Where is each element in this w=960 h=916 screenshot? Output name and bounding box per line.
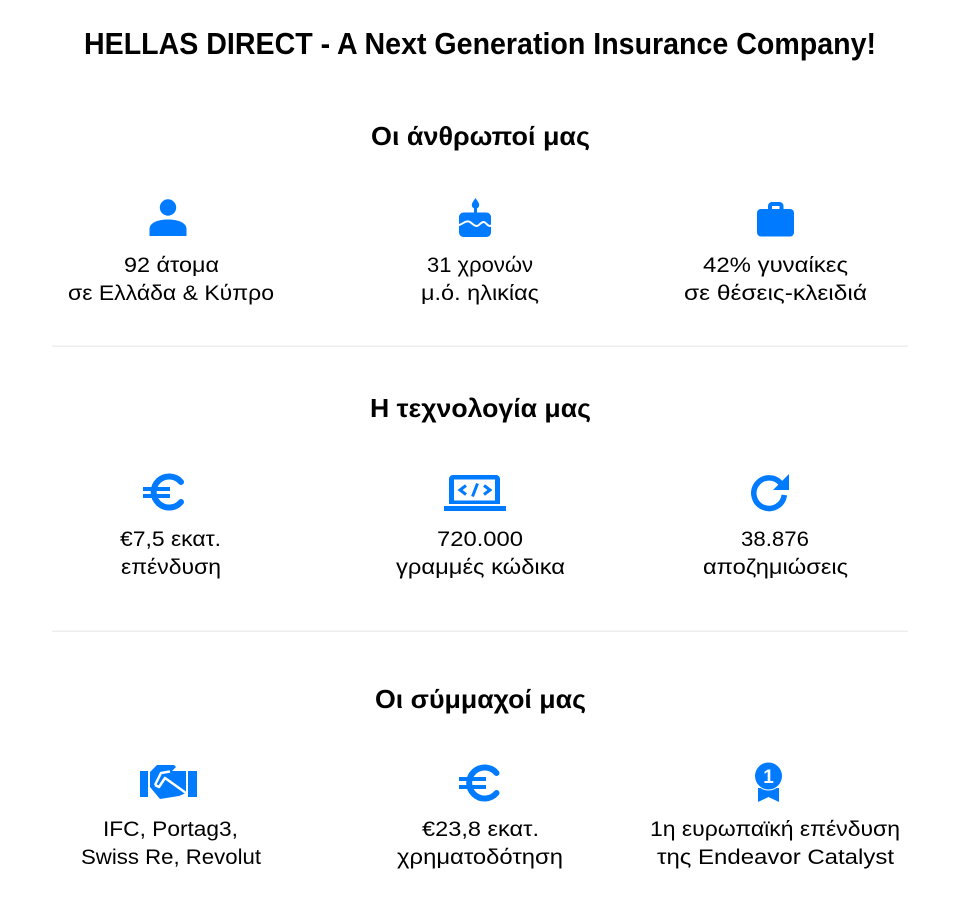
- panel: our people: [68, 121, 867, 305]
- panel: our technology: [120, 393, 848, 579]
- stat: average age: 31 χρονών: [427, 254, 533, 277]
- stat: women in key positions: σε θέσεις-κλειδιά: [684, 282, 867, 305]
- stat: investment: επένδυση: [121, 556, 221, 579]
- panel: our allies: [81, 684, 900, 869]
- icon: refresh arrow: [754, 474, 789, 508]
- stat: people count: [68, 254, 274, 305]
- stat: lines of code: γραμμές κώδικα: [396, 556, 565, 579]
- stat: Endeavor: [650, 818, 900, 869]
- icon: medal: 1: [763, 767, 774, 788]
- stat: average age: [421, 254, 539, 305]
- stat: partners: [81, 818, 261, 869]
- stat: women in key positions: [684, 254, 867, 305]
- icon: briefcase: [757, 202, 794, 236]
- title: HELLAS DIRECT - A Next Generation Insurance Company!: [84, 26, 876, 61]
- icon: laptop with code: [444, 475, 506, 511]
- icon: medal: [754, 762, 783, 802]
- stat: lines of code: 720.000: [437, 528, 523, 551]
- stat: partners: IFC, Portag3,: [103, 818, 238, 841]
- stat: Endeavor: 1η ευρωπαϊκή επένδυση: [650, 818, 900, 841]
- stat: people count: 92 άτομα: [124, 254, 219, 277]
- stat: funding: χρηματοδότηση: [397, 846, 563, 869]
- stat: claims: αποζημιώσεις: [703, 556, 848, 579]
- stat: average age: μ.ό. ηλικίας: [421, 282, 539, 305]
- stat: women in key positions: 42% γυναίκες: [703, 254, 848, 277]
- icon: euro: [143, 476, 181, 508]
- icon: birthday cake: [456, 198, 494, 237]
- stat: partners: Swiss Re, Revolut: [81, 846, 261, 869]
- stat: funding: €23,8 εκατ.: [422, 818, 539, 841]
- heading: our technology: Η τεχνολογία μας: [370, 393, 591, 423]
- stat: people count: σε Ελλάδα & Κύπρο: [68, 282, 274, 305]
- icon: euro: [459, 768, 496, 798]
- heading: our allies: Οι σύμμαχοί μας: [375, 684, 586, 714]
- stat: funding: [397, 818, 563, 869]
- stat: claims: [703, 528, 848, 579]
- stat: claims: 38.876: [741, 528, 809, 551]
- icon: handshake: [140, 765, 197, 799]
- icon: person: [150, 199, 186, 236]
- stat: Endeavor: της Endeavor Catalyst: [657, 846, 894, 869]
- heading: our people: Οι άνθρωποί μας: [371, 121, 590, 151]
- stat: investment: €7,5 εκατ.: [120, 528, 221, 551]
- stat: investment: [120, 528, 221, 579]
- stat: lines of code: [396, 528, 565, 579]
